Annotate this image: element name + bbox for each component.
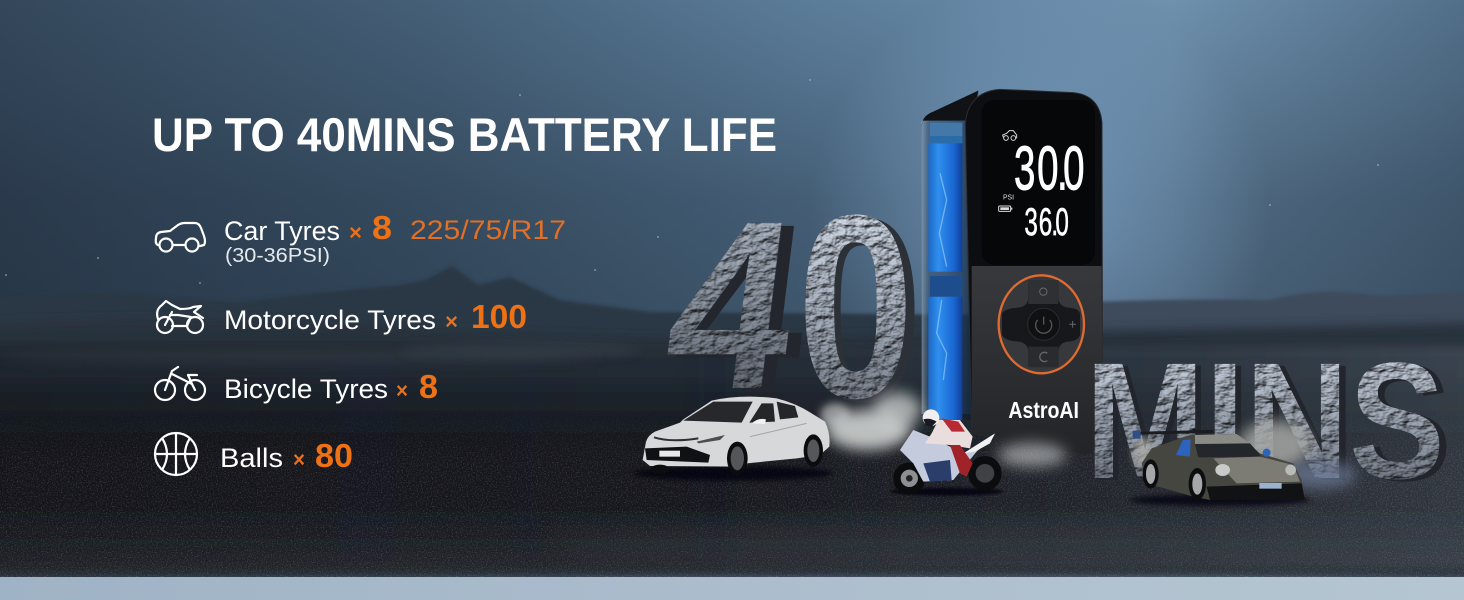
smoke [820,392,1066,467]
list: motorcycle tyres [157,298,527,335]
stone numeral 40: 0 [802,164,923,456]
multiplier: balls: × [293,447,305,472]
stars [5,79,1379,284]
battery cells [928,123,962,420]
product: AstroAI tyre inflator [922,89,1103,455]
battery indicator [999,206,1012,211]
value: 8: 8 [419,368,438,405]
list: bicycle tyres [155,367,438,405]
PSI label: PSI [1003,192,1014,201]
motorcycle with rider [890,409,1003,496]
label: motorcycle tyres: Motorcycle Tyres [224,305,436,335]
value: 100: 100 [471,298,527,335]
stone numeral 40 [654,161,923,456]
pressure reading 30.0: 30.0 [1014,133,1085,203]
inflator body [965,89,1103,455]
pressure range: (30-36PSI) [225,245,330,267]
value: 80: 80 [315,437,353,474]
control panel [972,266,1103,455]
translucent battery shell [922,91,980,423]
icon: basketball [155,433,197,475]
tyre size: 225/75/R17 [410,215,566,245]
value: 8: 8 [372,209,392,246]
icon: motorcycle [157,301,203,333]
stone numeral 40: 4 [654,171,809,440]
title: UP TO 40MINS BATTERY LIFE [152,108,777,161]
grey sports car [1130,431,1310,506]
multiplier: motorcycle: × [445,309,458,334]
smoke behind sports car [1133,421,1356,489]
list: car tyres [156,209,566,267]
label: balls: Balls [220,443,283,473]
orange control ring [999,275,1084,373]
stone numeral 40: 0 [797,161,914,453]
stone numeral 40: 4 [662,175,823,443]
pressure reading 36.0: 36.0 [1024,200,1069,243]
label: car tyres: Car Tyres [224,216,340,246]
multiplier: car: × [349,220,362,245]
AstroAI logo: AstroAI [1008,397,1079,423]
car mode icon [1003,131,1017,140]
white sedan [633,397,833,481]
bottom light strip [0,577,1464,600]
icon: bicycle [155,367,205,400]
display screen [982,100,1095,265]
directional pad [1002,280,1080,367]
label: bicycle tyres: Bicycle Tyres [224,374,388,404]
multiplier: bicycle: × [396,378,408,403]
list: balls [155,433,353,475]
icon: car [156,223,205,252]
